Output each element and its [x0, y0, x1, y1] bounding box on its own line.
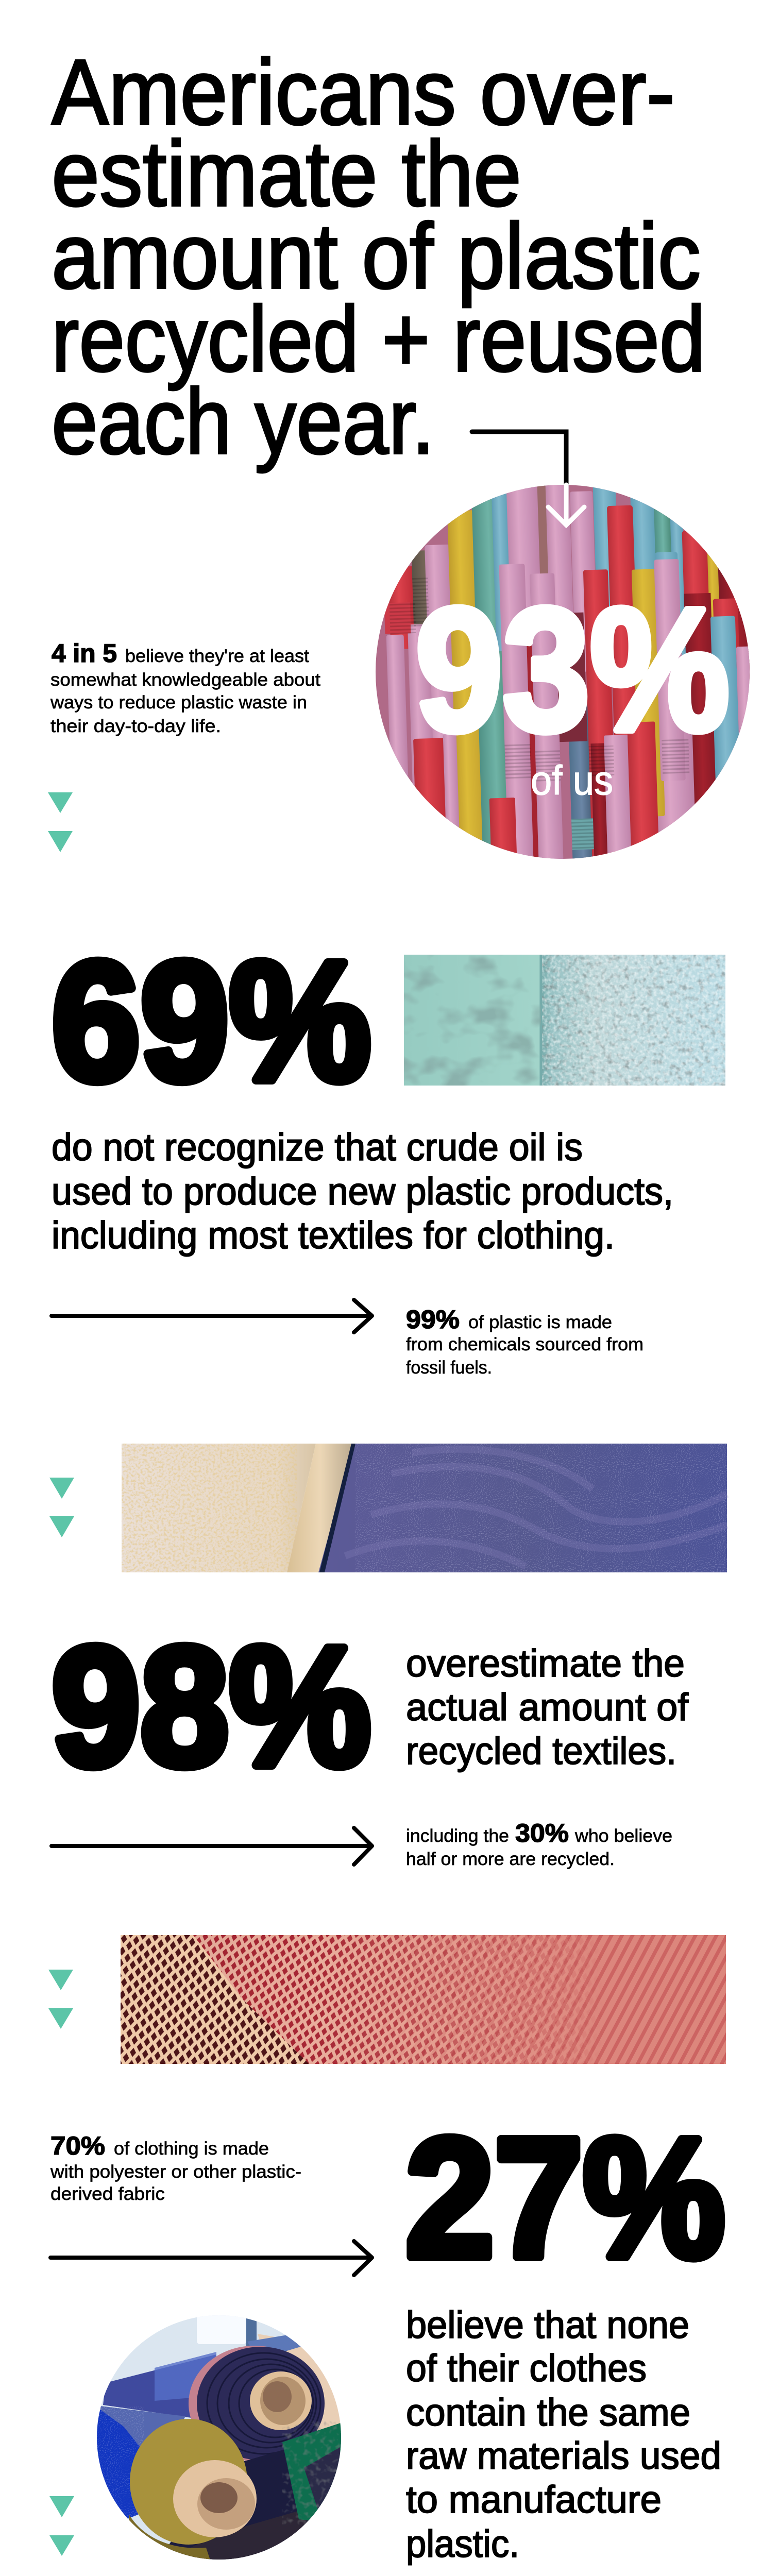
text: 70% of clothing: of clothing is made: [114, 2139, 269, 2159]
text: overestimate: recycled textiles.: [406, 1730, 676, 1772]
text: 70% of clothing: derived fabric: [50, 2184, 165, 2204]
arrow: [50, 2241, 372, 2275]
title: each year.: [52, 370, 435, 473]
text: 70% of clothing: with polyester or other plastic-: [50, 2162, 301, 2182]
text: 99% of plastic: 99%: [406, 1305, 460, 1334]
icon: teal down triangles: [48, 1970, 73, 2029]
title: [52, 41, 705, 473]
icon: teal down triangles: [49, 1478, 74, 1537]
photo circle: fabric rolls: [93, 2313, 345, 2566]
text: 99% of plastic: from chemicals sourced from: [406, 1334, 643, 1354]
text: believe that none: of their clothes: [406, 2347, 647, 2389]
title: estimate the: [52, 122, 521, 226]
stat: 93% of us: of us: [531, 757, 613, 803]
text: believe that none: to manufacture: [406, 2478, 662, 2521]
text: do not recognize: do not recognize that crude oil is: [52, 1126, 583, 1168]
photo: red weave fabric: [121, 1935, 726, 2064]
text: 4 in 5: believe they're at least: [125, 646, 309, 666]
text: believe that none: [406, 2303, 721, 2565]
stat: 98%: 98%: [52, 1611, 371, 1801]
title: amount of plastic: [52, 205, 701, 308]
text: do not recognize: used to produce new plastic products,: [52, 1170, 673, 1213]
text: 99% of plastic: fossil fuels.: [406, 1358, 492, 1378]
text: 99% of plastic: of plastic is made: [468, 1312, 612, 1332]
text: including the 30%: 30%: [515, 1819, 569, 1848]
text: including the 30%: half or more are recycled.: [406, 1849, 615, 1869]
text: 70% of clothing: [50, 2131, 301, 2204]
text: overestimate: [406, 1642, 688, 1772]
stat: 93% of us: 93%: [415, 572, 730, 768]
text: believe that none: contain the same: [406, 2391, 690, 2434]
text: believe that none: plastic.: [406, 2522, 519, 2565]
text: believe that none: believe that none: [406, 2303, 689, 2346]
text: 99% of plastic: [406, 1305, 643, 1378]
text: do not recognize: including most textiles for clothing.: [52, 1214, 615, 1257]
text: do not recognize: [52, 1126, 673, 1257]
arrow: [52, 1300, 372, 1332]
text: 4 in 5: [50, 639, 320, 736]
photo: plastic pellets: [404, 955, 725, 1086]
icon: teal down triangles: [49, 2496, 74, 2556]
photo: beige and denim fabric: [122, 1444, 727, 1572]
text: 4 in 5: their day-to-day life.: [50, 716, 221, 736]
text: including the 30%: who believe: [574, 1826, 672, 1846]
text: 4 in 5: somewhat knowledgeable about: [50, 670, 320, 690]
text: overestimate: overestimate the: [406, 1642, 685, 1685]
photo circle: plastic straws: [376, 485, 750, 859]
icon: teal down triangles: [48, 792, 73, 852]
text: including the 30%: [406, 1819, 672, 1869]
text: overestimate: actual amount of: [406, 1686, 688, 1728]
arrow: title to circle: [472, 432, 584, 525]
stat: 27%: 27%: [405, 2103, 725, 2293]
stat: 69%: 69%: [52, 926, 371, 1116]
text: 70% of clothing: 70%: [50, 2131, 105, 2160]
arrow: [52, 1828, 372, 1865]
title: Americans over-: [52, 41, 675, 144]
text: 4 in 5: 4 in 5: [52, 639, 117, 668]
title: recycled + reused: [52, 287, 705, 391]
text: believe that none: raw materials used: [406, 2434, 721, 2477]
text: including the 30%: including the: [406, 1826, 509, 1846]
text: 4 in 5: ways to reduce plastic waste in: [50, 692, 307, 713]
